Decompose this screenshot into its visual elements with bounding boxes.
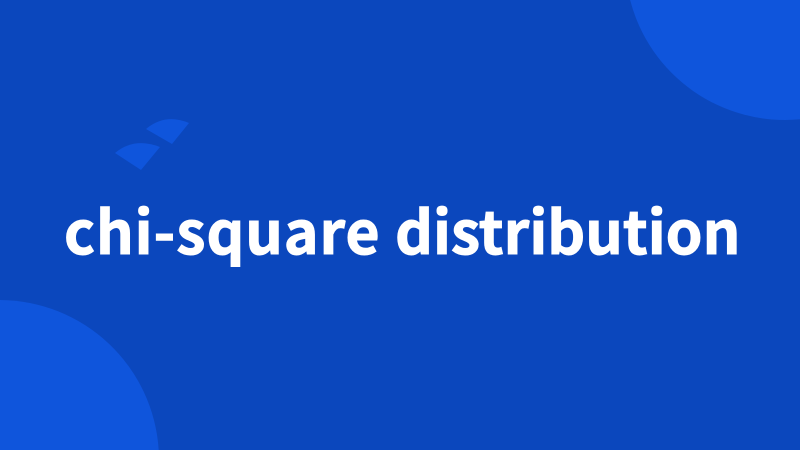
decorative circle: top right — [630, 0, 800, 120]
icon: logo fans — [115, 119, 189, 170]
decorative circle: bottom left — [0, 300, 159, 450]
title: distribution — [395, 186, 740, 271]
title: chi-square — [64, 186, 381, 271]
